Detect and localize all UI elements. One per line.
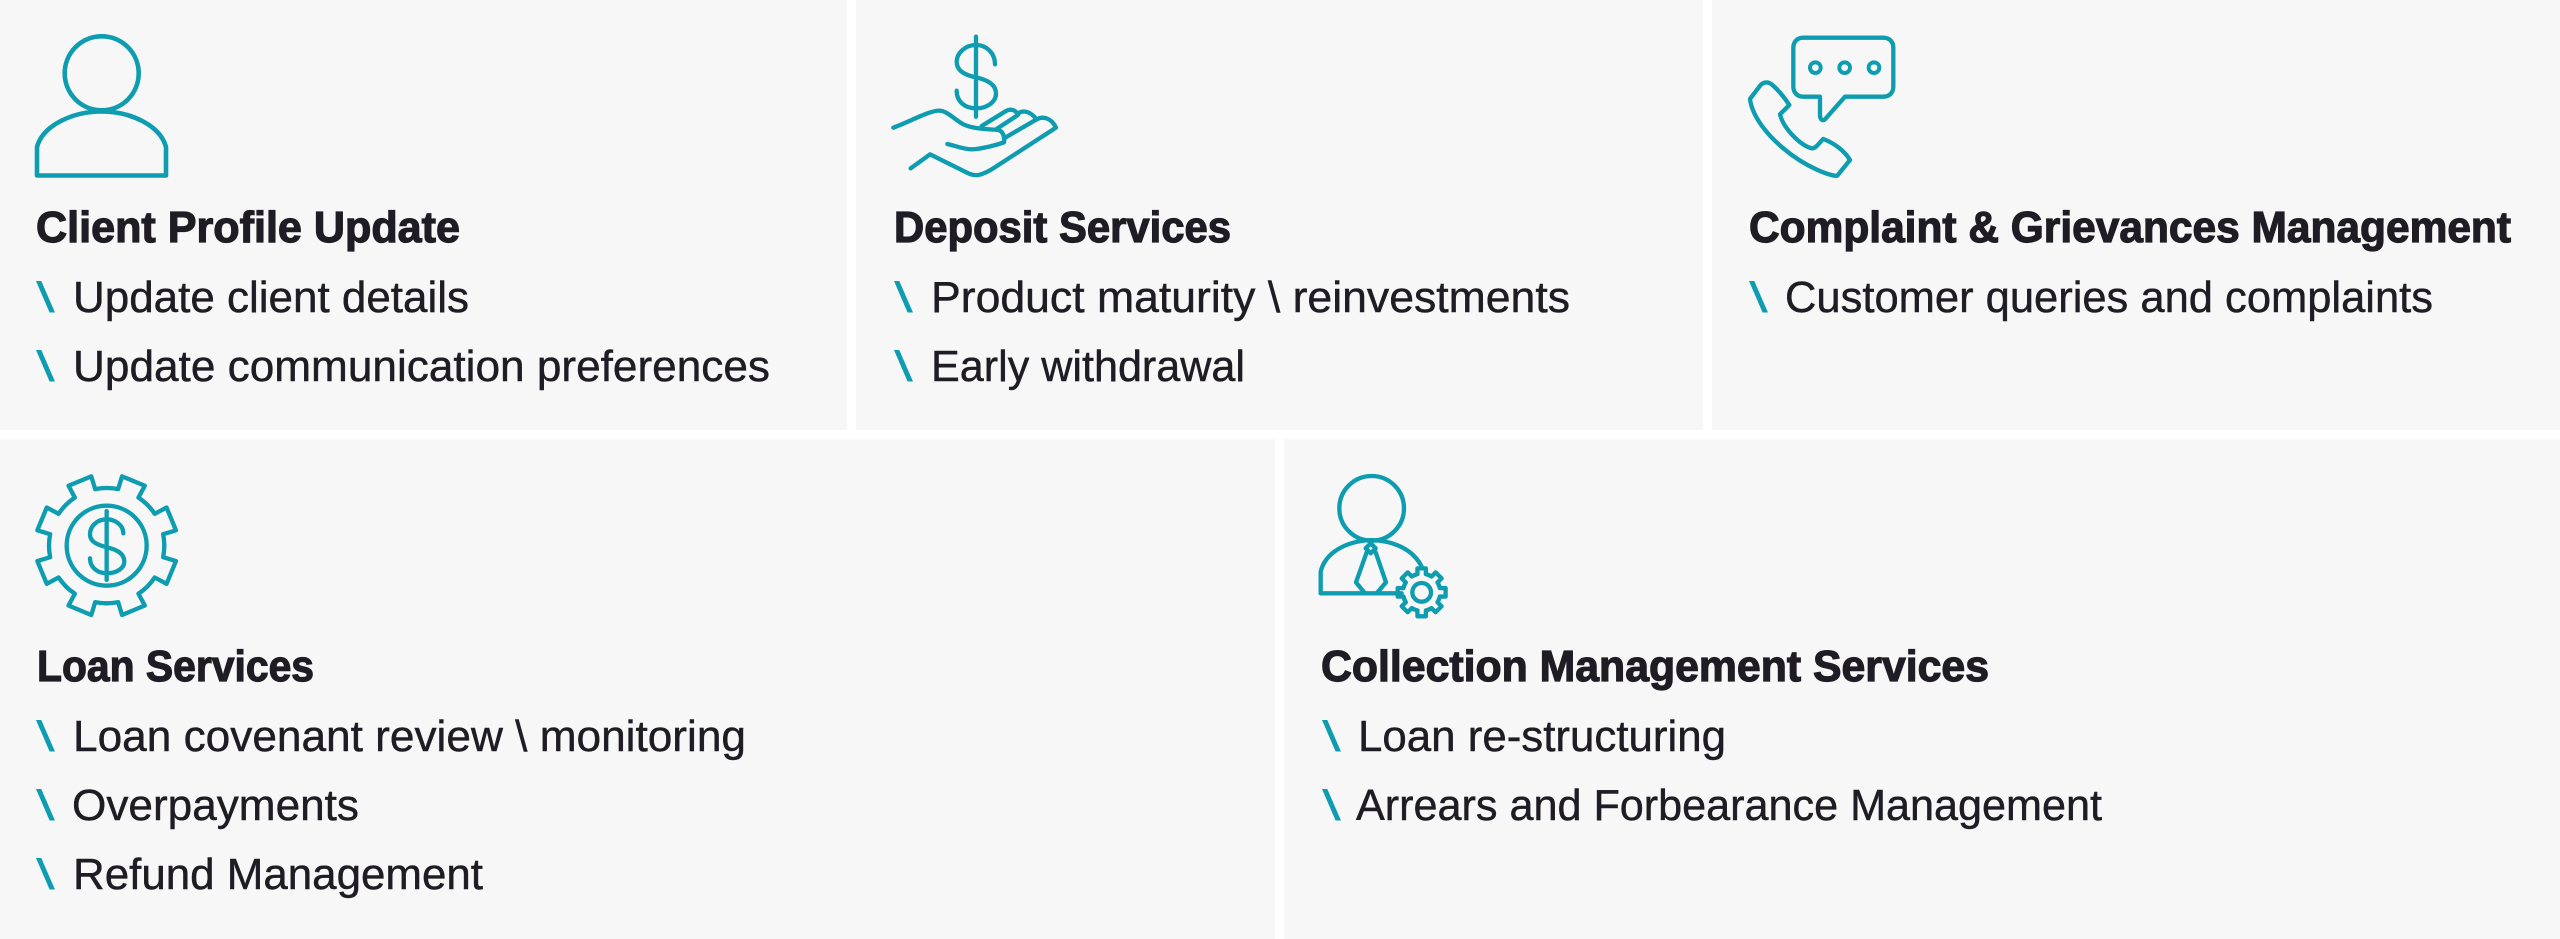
bullet: Customer queries and complaints: \ [1749, 274, 1768, 322]
panel background [1284, 439, 2560, 939]
panel: Client Profile Update [0, 0, 847, 430]
bullet: Arrears and Forbearance Management: Arrears and Forbearance Management [1356, 781, 2102, 830]
bullet: Loan covenant review \ monitoring: \ [36, 713, 55, 761]
icon: person [37, 36, 166, 176]
bullet: Loan re-structuring: \ [1322, 713, 1341, 761]
bullet: Overpayments: Overpayments [72, 781, 359, 830]
panel: Deposit Services [856, 0, 1703, 430]
heading: Loan Services [37, 642, 314, 691]
panel: Loan Services [0, 439, 1275, 939]
bullet: Loan covenant review \ monitoring: Loan covenant review \ monitoring [73, 712, 746, 761]
bullet: Arrears and Forbearance Management: \ [1322, 782, 1341, 830]
panel background [856, 0, 1703, 430]
panel background [0, 439, 1275, 939]
panel: Collection Management Services [1284, 439, 2560, 939]
bullet: Customer queries and complaints: Customer queries and complaints [1785, 273, 2433, 322]
panel background [0, 0, 847, 430]
bullet: Update client details: Update client details [73, 273, 469, 322]
heading: Complaint & Grievances Management [1749, 203, 2511, 252]
bullet: Refund Management: Refund Management [73, 850, 483, 899]
bullet: Update communication preferences: Update communication preferences [73, 342, 770, 391]
bullet: Early withdrawal: \ [894, 343, 913, 391]
icon: gear with dollar [34, 473, 180, 619]
bullet: Early withdrawal: Early withdrawal [931, 342, 1245, 391]
panel background [1712, 0, 2560, 430]
bullet: Overpayments: \ [36, 782, 55, 830]
bullet: Loan re-structuring: Loan re-structuring [1358, 712, 1726, 761]
heading: Deposit Services [894, 203, 1231, 252]
bullet: Update client details: \ [36, 274, 55, 322]
bullet: Product maturity \ reinvestments: \ [894, 274, 913, 322]
icon: businessperson with gear [1321, 476, 1446, 616]
icon: hand with dollar [893, 37, 1056, 175]
heading: Client Profile Update [36, 203, 460, 252]
bullet: Refund Management: \ [36, 851, 55, 899]
bullet: Product maturity \ reinvestments: Product maturity \ reinvestments [931, 273, 1570, 322]
heading: Collection Management Services [1321, 642, 1989, 691]
icon: phone with speech bubble [1750, 38, 1893, 176]
panel: Complaint & Grievances Management [1712, 0, 2560, 430]
bullet: Update communication preferences: \ [36, 343, 55, 391]
